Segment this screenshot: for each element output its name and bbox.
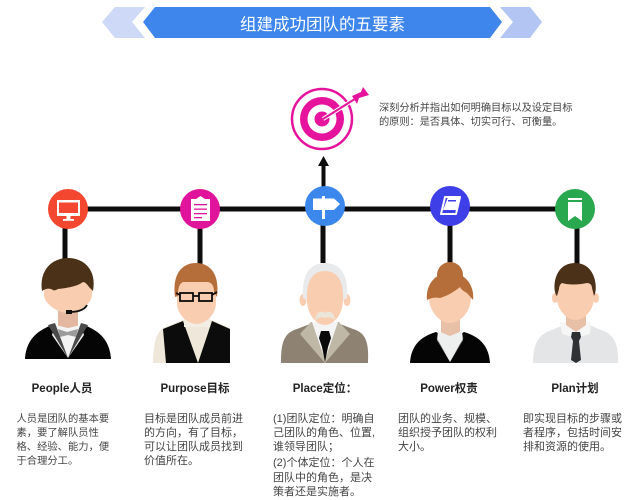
text: People description xyxy=(16,412,109,467)
text: Plan description xyxy=(523,411,622,453)
text: Place description: 策者还是实施者。 xyxy=(273,484,361,498)
person: power, woman with bun xyxy=(410,262,490,363)
heading: Plan: Plan计划 xyxy=(551,381,599,395)
title banner: 组建成功团队的五要素 xyxy=(240,15,405,34)
icon: plan bookmark xyxy=(555,189,595,229)
text: Plan description: 即实现目标的步骤或 xyxy=(523,411,622,425)
text: Place description: 谁领导团队； xyxy=(273,439,339,453)
heading: Purpose: Purpose目标 xyxy=(160,381,230,395)
text: People description: 素，要了解队员性 xyxy=(16,426,99,439)
heading: Power: Power权责 xyxy=(420,381,478,395)
text: Power description: 团队的业务、规模、 xyxy=(398,411,497,425)
person: plan, man in shirt xyxy=(533,263,618,363)
text: Place description: 己团队的角色、位置, xyxy=(273,425,375,439)
target description: 深刻分析并指出如何明确目标以及设定目标 xyxy=(379,101,573,114)
person: purpose, glasses and vest xyxy=(153,263,230,363)
text: Place description xyxy=(273,411,375,498)
text: Purpose description: 目标是团队成员前进 xyxy=(144,411,243,425)
timeline connectors xyxy=(62,206,580,264)
target description: 的原则：是否具体、切实可行、可衡量。 xyxy=(379,115,562,128)
text: People description: 人员是团队的基本要 xyxy=(16,412,109,425)
title banner xyxy=(102,7,542,38)
icon: target xyxy=(292,87,369,149)
text: Place description: (1)团队定位：明确自 xyxy=(273,411,374,425)
text: Place description: 团队中的角色，是决 xyxy=(273,470,372,484)
text: Plan description: 者程序，包括时间安 xyxy=(523,425,622,439)
icon: purpose clipboard xyxy=(180,189,220,229)
person: people, headset agent xyxy=(25,258,111,359)
target description xyxy=(379,101,573,128)
text: People description: 于合理分工。 xyxy=(16,454,78,467)
heading: Place: Place定位： xyxy=(293,381,357,395)
text: Purpose description: 可以让团队成员找到 xyxy=(144,439,243,453)
text: Power description: 组织授予团队的权利 xyxy=(398,425,497,439)
icon: power book xyxy=(430,186,470,226)
person: place, elderly man xyxy=(281,263,368,363)
text: Purpose description: 的方向，有了目标， xyxy=(144,425,243,439)
text: Purpose description xyxy=(144,411,243,467)
text: Plan description: 排和资源的使用。 xyxy=(523,439,611,453)
text: Power description xyxy=(398,411,497,453)
text: Place description: (2)个体定位：个人在 xyxy=(273,455,374,469)
icon: place signpost xyxy=(305,186,345,226)
text: People description: 格、经验、能力，便 xyxy=(16,440,109,453)
arrow up to target xyxy=(318,156,329,190)
text: Purpose description: 价值所在。 xyxy=(144,454,199,467)
heading: People: People人员 xyxy=(32,382,92,395)
icon: people monitor xyxy=(48,189,88,229)
text: Power description: 大小。 xyxy=(398,439,431,453)
